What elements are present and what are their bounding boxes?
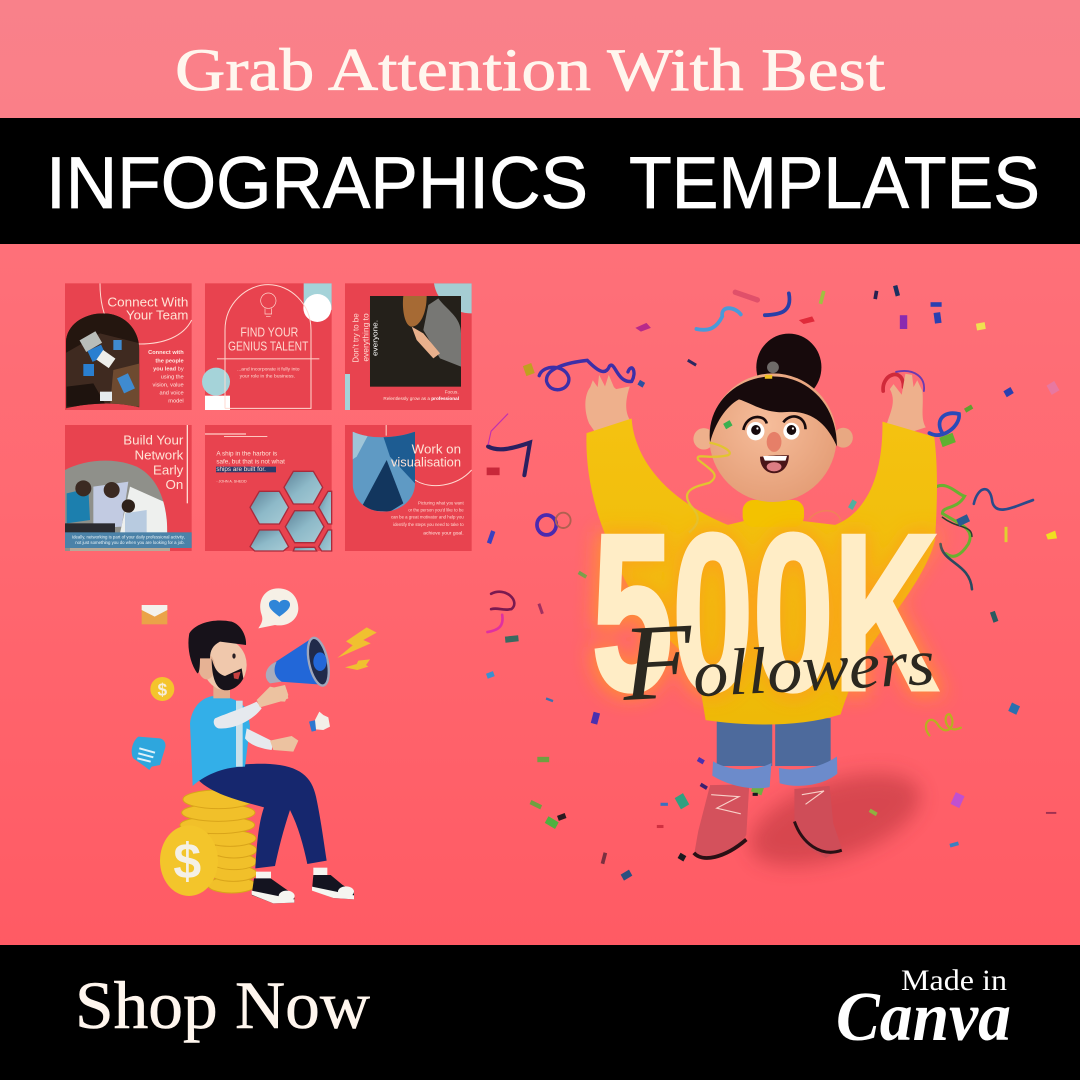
card: build your network: On <box>166 477 183 492</box>
card: connect with your team: the people <box>155 358 184 364</box>
footer bar <box>0 945 1080 1080</box>
card: ship in the harbor: - JOHN A. SHEDD <box>216 480 247 484</box>
template thumbnails grid <box>65 283 472 551</box>
boots <box>694 784 842 860</box>
card: ship in the harbor <box>205 425 332 551</box>
card: don't try to be everything: Focus. <box>445 390 459 395</box>
card: don't try to be everything: Don't try to be <box>351 313 361 363</box>
card: work on visualisation: or the person you'd like to be <box>408 507 464 512</box>
large dollar coin: $ <box>173 833 201 889</box>
icon: lightning bolts <box>337 627 377 670</box>
card: work on visualisation: visualisation <box>391 454 461 469</box>
made in canva: Canva <box>836 979 1011 1056</box>
gold ribbon over sweater <box>687 443 730 533</box>
card: don't try to be everything: Relentlessly grow as a professional <box>383 396 459 401</box>
card: build your network: Ideally, networking is part of your daily professional activity, <box>72 535 185 540</box>
card: build your network <box>65 425 192 551</box>
card: work on visualisation: Work on <box>412 442 461 457</box>
jeans <box>712 718 837 788</box>
illustration: man with megaphone on coins <box>132 588 377 903</box>
trousers <box>198 764 327 868</box>
card: build your network: not just something you do when you are looking for a job. <box>75 540 185 545</box>
card: ship in the harbor: safe, but that is not what <box>216 459 285 466</box>
card: don't try to be everything <box>345 283 472 410</box>
top headline: Grab Attention With Best <box>175 37 885 103</box>
socks and shoes <box>252 868 354 903</box>
neck, head and beard <box>188 620 247 698</box>
card: ship in the harbor: ships are built for. <box>216 466 266 473</box>
icon: chat bubble <box>132 737 166 770</box>
card: build your network: Network <box>134 447 184 462</box>
card: connect with your team: you lead by <box>153 367 184 373</box>
megaphone <box>266 636 333 702</box>
card: work on visualisation: identify the steps you need to take to <box>393 522 464 527</box>
card: find your genius talent: your role in the business. <box>240 374 295 380</box>
card: connect with your team: Your Team <box>126 308 188 322</box>
card: ship in the harbor: A ship in the harbor is <box>216 451 277 458</box>
card: find your genius talent: FIND YOUR <box>240 325 298 339</box>
icon: envelope <box>142 605 167 624</box>
illustration: celebrating woman with confetti <box>486 285 1059 884</box>
card: connect with your team: Connect with <box>148 350 184 356</box>
icon: dollar coin small: $ <box>158 679 168 699</box>
icon: heart speech bubble <box>258 588 298 628</box>
icon: dollar coin small <box>150 677 174 701</box>
card: work on visualisation: achieve your goal. <box>423 531 464 537</box>
arms and hands <box>585 374 926 437</box>
confetti pieces <box>486 285 1059 881</box>
coin stack <box>180 790 257 893</box>
card: find your genius talent: GENIUS TALENT <box>228 339 309 353</box>
shirt <box>190 696 250 786</box>
confetti ribbons <box>487 292 1033 735</box>
card: connect with your team: using the <box>161 375 184 381</box>
card: build your network: Build Your <box>123 432 184 447</box>
card: find your genius talent: ...and incorporate it fully into <box>237 366 300 372</box>
card: build your network: Early <box>153 462 184 477</box>
title banner: TEMPLATES <box>629 143 1040 224</box>
card: work on visualisation: Picturing what you want <box>418 500 464 505</box>
card: work on visualisation: can be a great motivator and help you <box>391 515 464 520</box>
card: connect with your team: Connect With <box>107 296 188 310</box>
made in canva: Made in <box>901 964 1007 997</box>
floor shadow <box>739 755 931 884</box>
card: connect with your team: model <box>168 399 184 405</box>
large dollar coin <box>160 825 218 896</box>
500K followers badge <box>590 487 940 739</box>
sweater <box>586 419 937 724</box>
title banner <box>0 118 1080 244</box>
card: don't try to be everything: everyone. <box>370 320 379 356</box>
card: find your genius talent <box>202 283 332 410</box>
icon: thumbs up <box>309 712 330 732</box>
shop now: Shop Now <box>75 967 370 1043</box>
card: don't try to be everything: everything to <box>360 313 370 362</box>
card: work on visualisation <box>345 425 472 551</box>
followers script: Followers <box>618 589 937 724</box>
arm and sleeves <box>214 687 298 752</box>
card: connect with your team: and voice <box>159 391 184 397</box>
head <box>693 334 853 502</box>
card: connect with your team: vision, value <box>153 383 184 389</box>
card: connect with your team <box>65 283 192 410</box>
turtleneck <box>743 500 804 527</box>
title banner: INFOGRAPHICS <box>46 143 588 224</box>
